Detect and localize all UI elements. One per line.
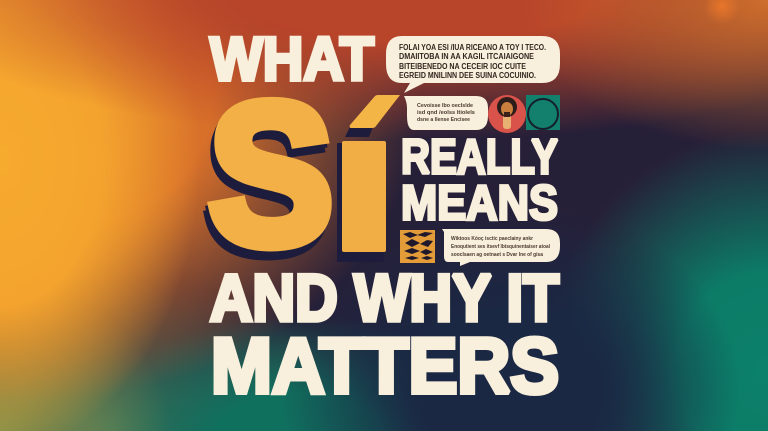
speech bubble: bottom: Wiktoos Kóoç isctic paecIainy ankr <box>451 236 534 242</box>
speech bubble: middle: Cevoisse Ibo oecIslde <box>417 103 473 109</box>
heading: WHAT: WHAT <box>210 25 374 93</box>
letter S: S <box>205 72 329 295</box>
speech bubble: middle: dsne a Ilense Encisee <box>417 117 470 123</box>
big word: SÍ <box>205 63 400 295</box>
icon: woven pattern <box>400 230 435 263</box>
speech bubble: top: DMAIITOBA IN AA KAGIL ITCAIAIGONE <box>399 52 535 61</box>
heading: MEANS: MEANS <box>401 176 558 230</box>
speech bubble: bottom: soocIsaen ag oetnaet s Dvar Ine of gisa <box>451 252 544 258</box>
heading: MATTERS: MATTERS <box>211 322 559 410</box>
speech bubble: top: BITEIBENEDO NA CECEIR IOC CUITE <box>399 62 527 71</box>
speech bubble: middle: isd qnd /eoIss ItioIeIs <box>417 110 475 116</box>
icon: face portrait <box>488 95 526 133</box>
speech bubble: bottom: Enoqutient ses itsevf Ibtsquinentaiser atoal <box>451 244 550 250</box>
speech bubble: middle <box>404 96 488 130</box>
speech bubble: bottom <box>438 229 560 266</box>
speech bubble: top: FOLAI YOA ESI /IUA RICEANO A TOY I TECO. <box>399 43 546 52</box>
letter S: S <box>209 63 333 286</box>
icon: teal circle badge <box>526 95 560 130</box>
heading: REALLY: REALLY <box>401 130 558 184</box>
heading: AND WHY IT: AND WHY IT <box>210 261 559 335</box>
speech bubble: top <box>386 36 560 93</box>
speech bubble: top: EGREID MNILINN DEE SUINA COCUINIO. <box>399 71 536 80</box>
letter S: S <box>207 67 331 290</box>
letter I with accent <box>337 95 400 262</box>
